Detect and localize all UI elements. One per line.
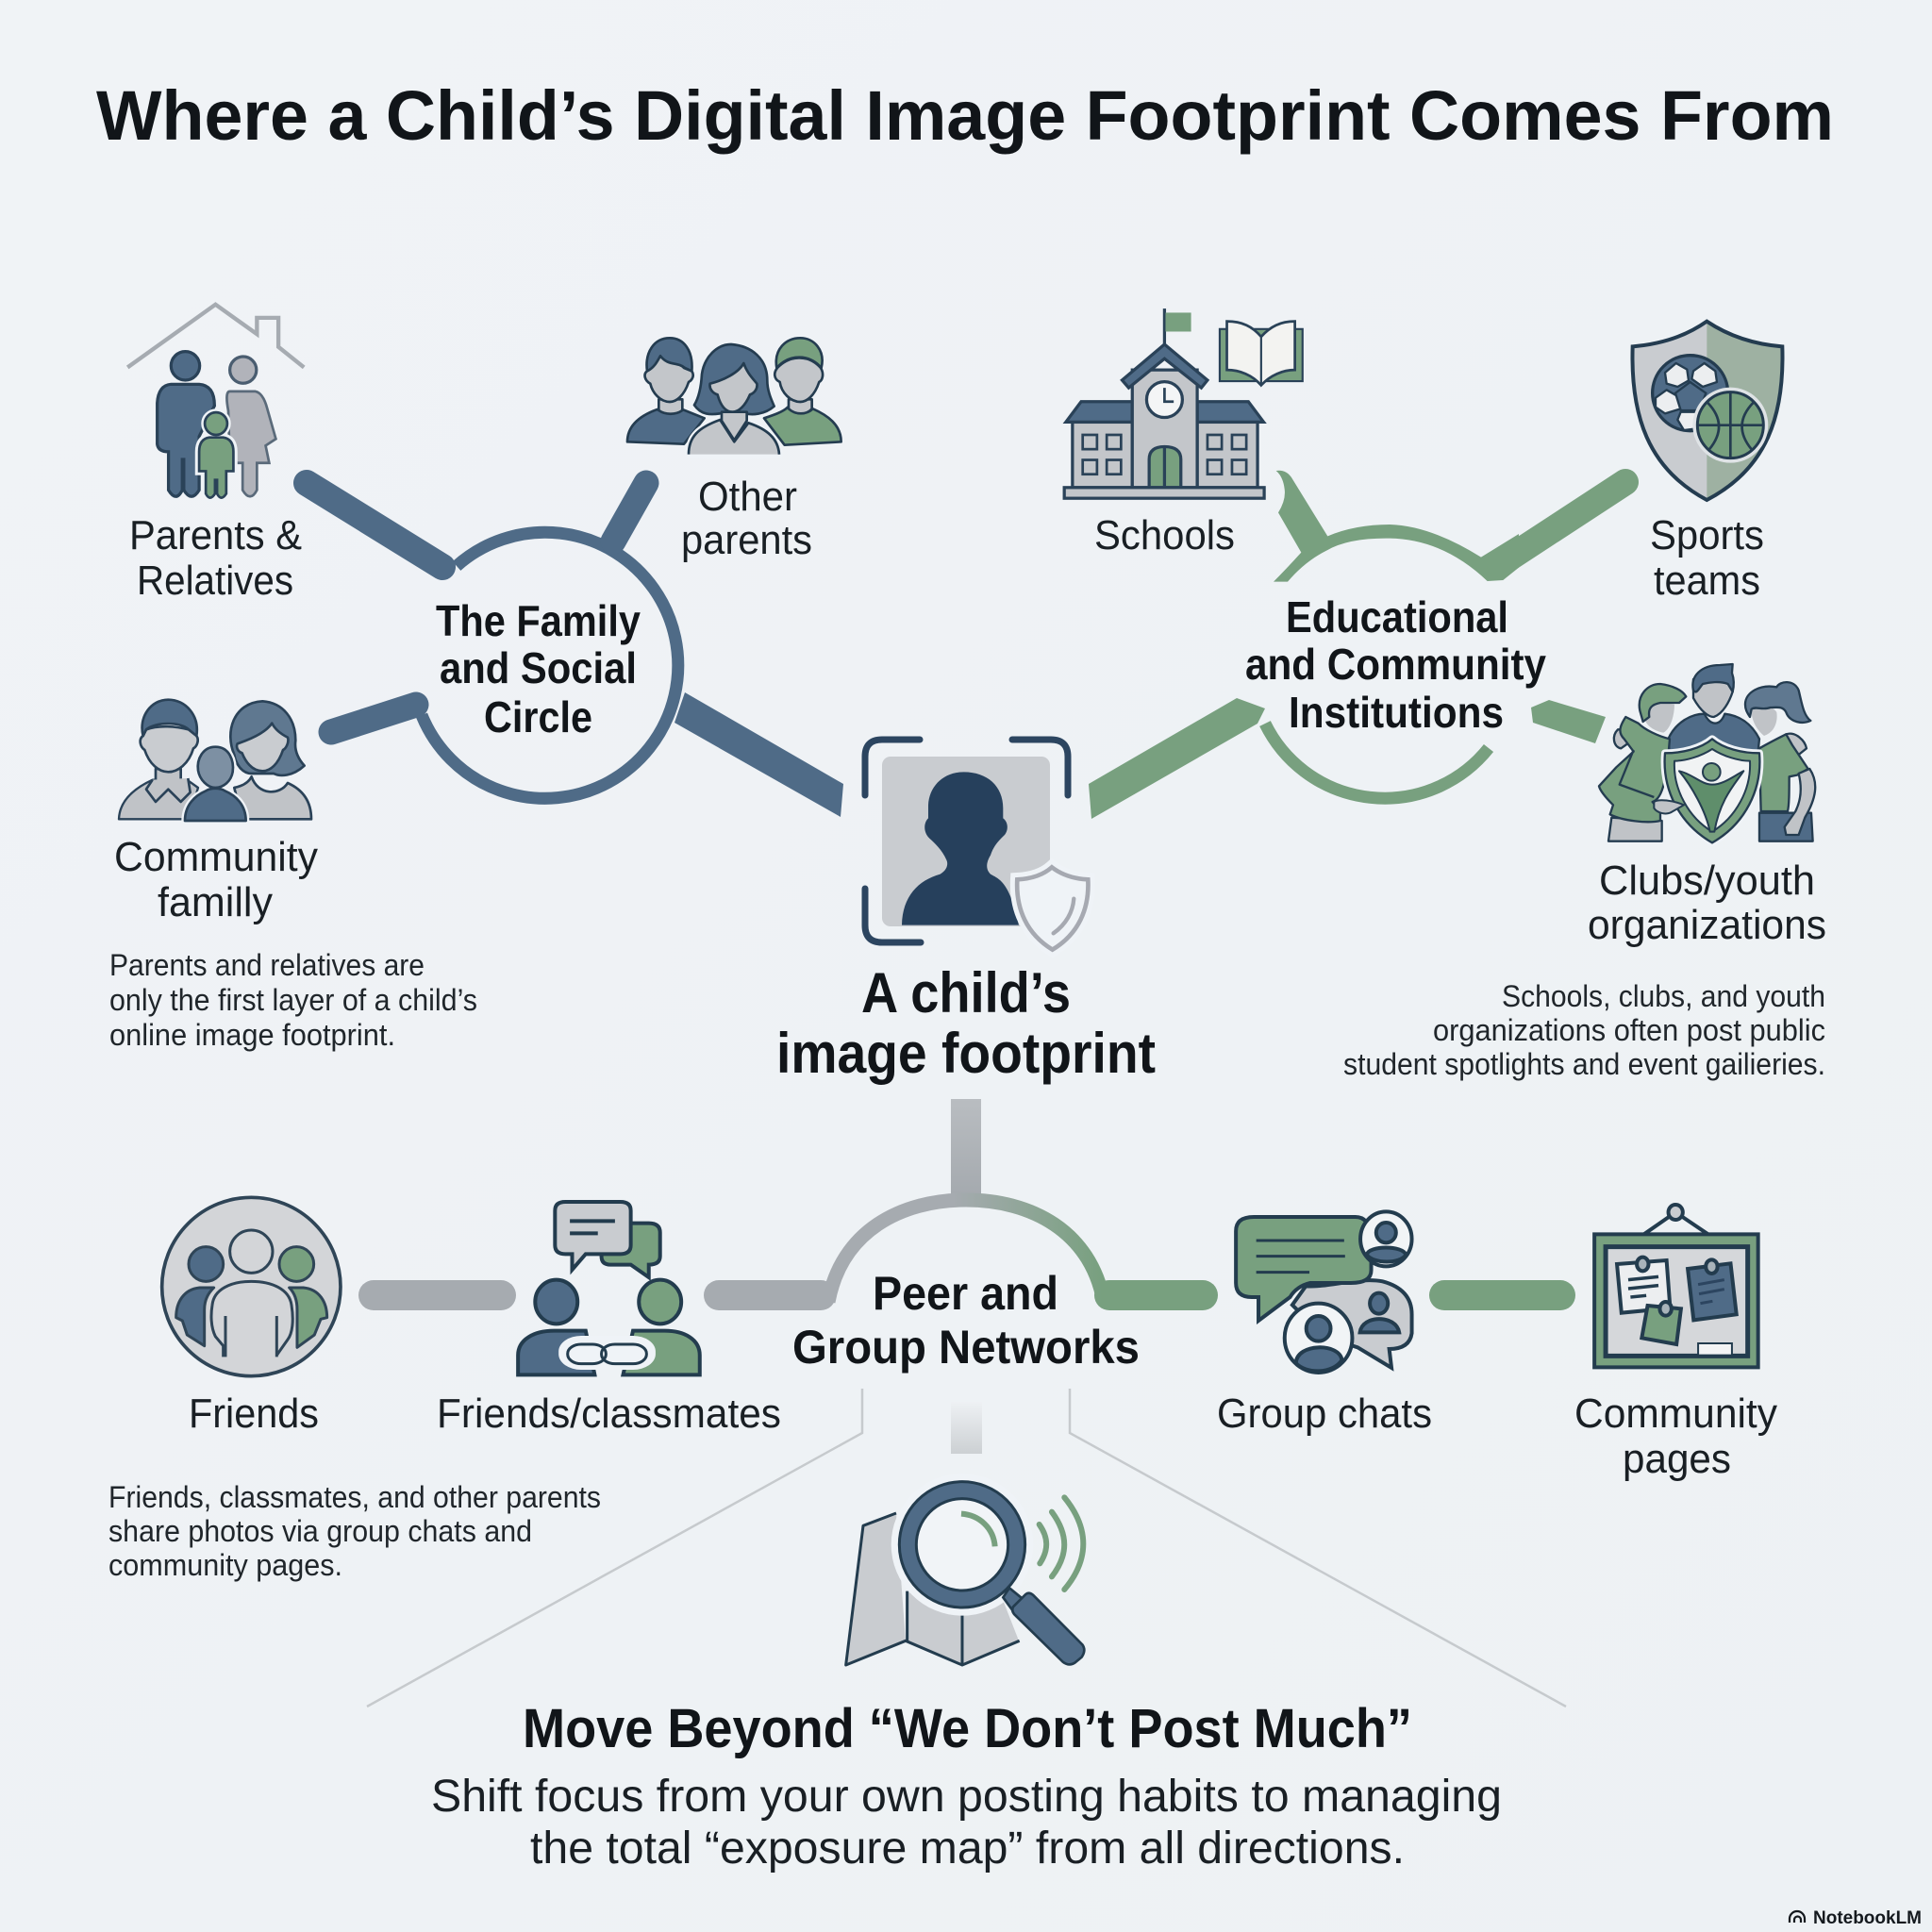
label: clubs and youth organizations xyxy=(1588,858,1826,948)
hub ring bottom arc xyxy=(1265,724,1489,798)
label: sports teams: teams xyxy=(1654,558,1760,604)
heading: educational and community institutions: and Community xyxy=(1245,640,1546,689)
conclusion heading: Move Beyond “We Don’t Post Much” xyxy=(523,1698,1412,1759)
connector to parents and relatives xyxy=(307,483,442,567)
label: group chats: Group chats xyxy=(1217,1391,1432,1437)
label: friends: Friends xyxy=(189,1391,319,1437)
text block: family circle note xyxy=(109,948,477,1052)
label: community family xyxy=(114,834,318,925)
icon: community pages bulletin board xyxy=(1594,1205,1758,1367)
heading: peer and group networks: Peer and xyxy=(873,1267,1058,1320)
connector to community family xyxy=(331,705,416,732)
title: Where a Child’s Digital Image Footprint Comes From xyxy=(96,76,1834,155)
icon: school and book xyxy=(1064,308,1303,498)
watermark: NotebookLM: NotebookLM xyxy=(1813,1908,1922,1928)
text block: peer networks note xyxy=(108,1480,601,1582)
icon: friends and classmates chat and link xyxy=(518,1202,700,1374)
icon: exposure map with magnifying glass xyxy=(846,1474,1084,1665)
heading: educational and community institutions xyxy=(1245,592,1546,737)
label: community family: familly xyxy=(158,879,273,925)
conclusion text: Shift focus from your own posting habits to managing xyxy=(431,1772,1502,1822)
panel: peer and group networks connectors xyxy=(358,1099,1575,1707)
label: parents and relatives: Parents & xyxy=(129,512,302,558)
heading: the family and social circle: Circle xyxy=(484,692,592,741)
funnel lines to conclusion xyxy=(367,1389,1566,1707)
icon: other parents group xyxy=(627,338,841,456)
text block: institutions note: Schools, clubs, and youth xyxy=(1502,979,1825,1013)
label: community pages xyxy=(1574,1391,1777,1482)
label: clubs and youth organizations: organizations xyxy=(1588,902,1826,948)
connector to central footprint xyxy=(675,692,843,817)
hub ring top arc with connector to schools xyxy=(1274,471,1519,582)
connector to other parents xyxy=(613,483,646,541)
label: clubs and youth organizations: Clubs/youth xyxy=(1599,858,1815,904)
connector to clubs xyxy=(1531,700,1606,743)
hub arch xyxy=(828,1200,1104,1302)
label: other parents: parents xyxy=(681,517,812,563)
panel: the family and social circle connectors xyxy=(307,483,843,817)
text block: family circle note: Parents and relatives are xyxy=(109,948,425,982)
connector to sports teams xyxy=(1500,482,1625,564)
text block: family circle note: only the first layer of a child’s xyxy=(109,983,477,1017)
heading: a child's image footprint: image footprint xyxy=(776,1022,1156,1085)
icon: community family xyxy=(119,700,311,821)
connector from footprint down to peer hub xyxy=(951,1099,981,1198)
connector down to exposure map xyxy=(951,1402,982,1454)
text block: family circle note: online image footprint. xyxy=(109,1018,395,1052)
panel: educational and community institutions connectors xyxy=(1089,471,1625,819)
icon: parents and relatives family under a house xyxy=(127,305,304,498)
label: other parents: Other xyxy=(698,474,797,520)
icon: friends in a circle xyxy=(162,1197,341,1376)
label: friends/classmates: Friends/classmates xyxy=(437,1391,781,1437)
conclusion text: the total “exposure map” from all directions. xyxy=(530,1824,1405,1874)
text block: peer networks note: community pages. xyxy=(108,1548,342,1582)
label: community pages: Community xyxy=(1574,1391,1777,1437)
label: parents and relatives: Relatives xyxy=(137,558,293,604)
heading: peer and group networks xyxy=(792,1267,1140,1374)
panel: central child's image footprint icon xyxy=(865,740,1088,950)
label: sports teams xyxy=(1650,512,1764,604)
label: community pages: pages xyxy=(1623,1436,1731,1482)
text block: institutions note: student spotlights and event gailieries. xyxy=(1343,1047,1825,1081)
heading: peer and group networks: Group Networks xyxy=(792,1321,1140,1374)
icon: group chats xyxy=(1236,1211,1412,1373)
heading: a child's image footprint: A child’s xyxy=(861,961,1071,1024)
label: schools: Schools xyxy=(1094,512,1235,558)
heading: the family and social circle: The Family xyxy=(436,596,641,645)
text block: institutions note xyxy=(1343,979,1825,1081)
conclusion text xyxy=(431,1772,1502,1874)
text block: peer networks note: share photos via group chats and xyxy=(108,1514,532,1548)
connector from hub to friends/classmates xyxy=(704,1280,836,1310)
right pill connector xyxy=(1429,1280,1575,1310)
connector to central footprint xyxy=(1089,698,1265,819)
heading: the family and social circle xyxy=(436,596,641,741)
label: sports teams: Sports xyxy=(1650,512,1764,558)
left pill connector xyxy=(358,1280,516,1310)
hub ring: family and social circle xyxy=(422,532,678,798)
connector from hub to group chats xyxy=(1094,1280,1218,1310)
text block: peer networks note: Friends, classmates, and other parents xyxy=(108,1480,601,1514)
heading: a child's image footprint xyxy=(776,961,1156,1085)
label: community family: Community xyxy=(114,834,318,880)
label: other parents xyxy=(681,474,812,563)
heading: educational and community institutions: Institutions xyxy=(1289,688,1504,737)
icon: sports team shield with balls xyxy=(1632,322,1783,500)
text block: institutions note: organizations often post public xyxy=(1433,1013,1825,1047)
icon: clubs and youth organizations group xyxy=(1599,664,1815,842)
heading: educational and community institutions: Educational xyxy=(1286,592,1508,641)
heading: the family and social circle: and Social xyxy=(440,643,637,692)
label: parents and relatives xyxy=(129,512,302,604)
